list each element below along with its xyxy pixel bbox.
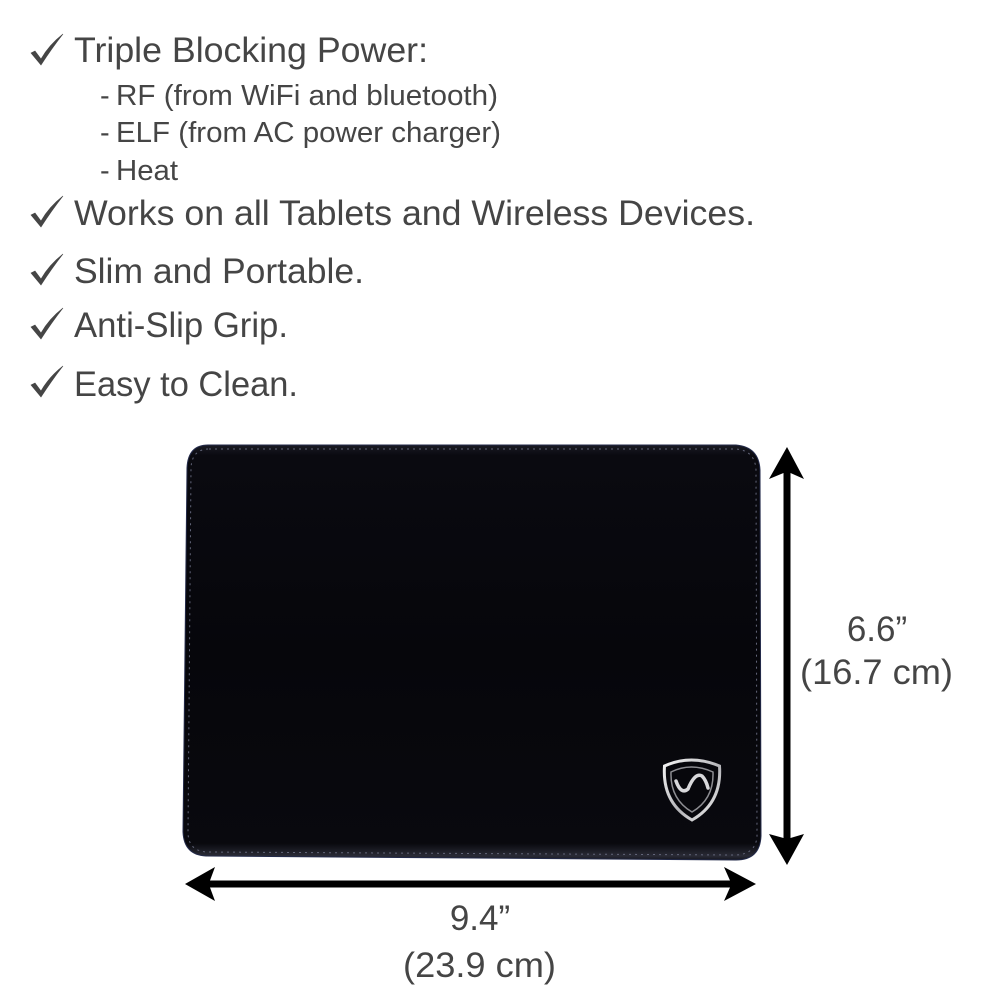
height in centimetres: (16.7 cm) xyxy=(800,653,953,692)
icon: check mark xyxy=(31,254,63,285)
feature: anti-slip grip xyxy=(31,306,288,345)
product: black pad xyxy=(183,445,761,860)
icon: check mark xyxy=(31,34,63,65)
sub-item: ELF: ELF (from AC power charger) xyxy=(116,117,501,149)
feature: easy to clean xyxy=(31,365,298,404)
height label xyxy=(800,610,953,692)
sub-item: heat: - xyxy=(100,155,110,187)
feature heading: Triple Blocking Power: xyxy=(74,31,428,70)
shield outline xyxy=(664,760,720,820)
sub-item: heat: Heat xyxy=(116,155,178,187)
icon: check mark xyxy=(31,196,63,227)
pad body xyxy=(183,445,761,860)
feature text: Slim and Portable. xyxy=(74,252,364,291)
sub-item: ELF: - xyxy=(100,117,110,149)
arrow: height xyxy=(769,447,804,865)
sub-item: RF: - xyxy=(100,80,110,112)
feature: works on all devices xyxy=(31,194,755,233)
shield wave xyxy=(676,775,708,791)
icon: check mark xyxy=(31,366,63,397)
sub-item: RF: RF (from WiFi and bluetooth) xyxy=(116,80,498,112)
icon: check mark xyxy=(31,308,63,339)
icon: shield logo xyxy=(664,760,720,820)
feature checklist xyxy=(31,31,755,404)
arrow: width xyxy=(185,867,756,901)
feature: slim and portable xyxy=(31,252,364,291)
shield inner outline xyxy=(671,767,713,812)
feature text: Anti-Slip Grip. xyxy=(74,306,288,345)
feature: triple blocking power xyxy=(31,31,428,70)
pad stitching xyxy=(188,449,757,855)
width in inches: 9.4” xyxy=(450,899,510,938)
height in inches: 6.6” xyxy=(847,610,907,649)
width label xyxy=(403,899,556,985)
feature text: Easy to Clean. xyxy=(74,365,298,404)
width in centimetres: (23.9 cm) xyxy=(403,946,556,985)
feature text: Works on all Tablets and Wireless Devices. xyxy=(74,194,755,233)
